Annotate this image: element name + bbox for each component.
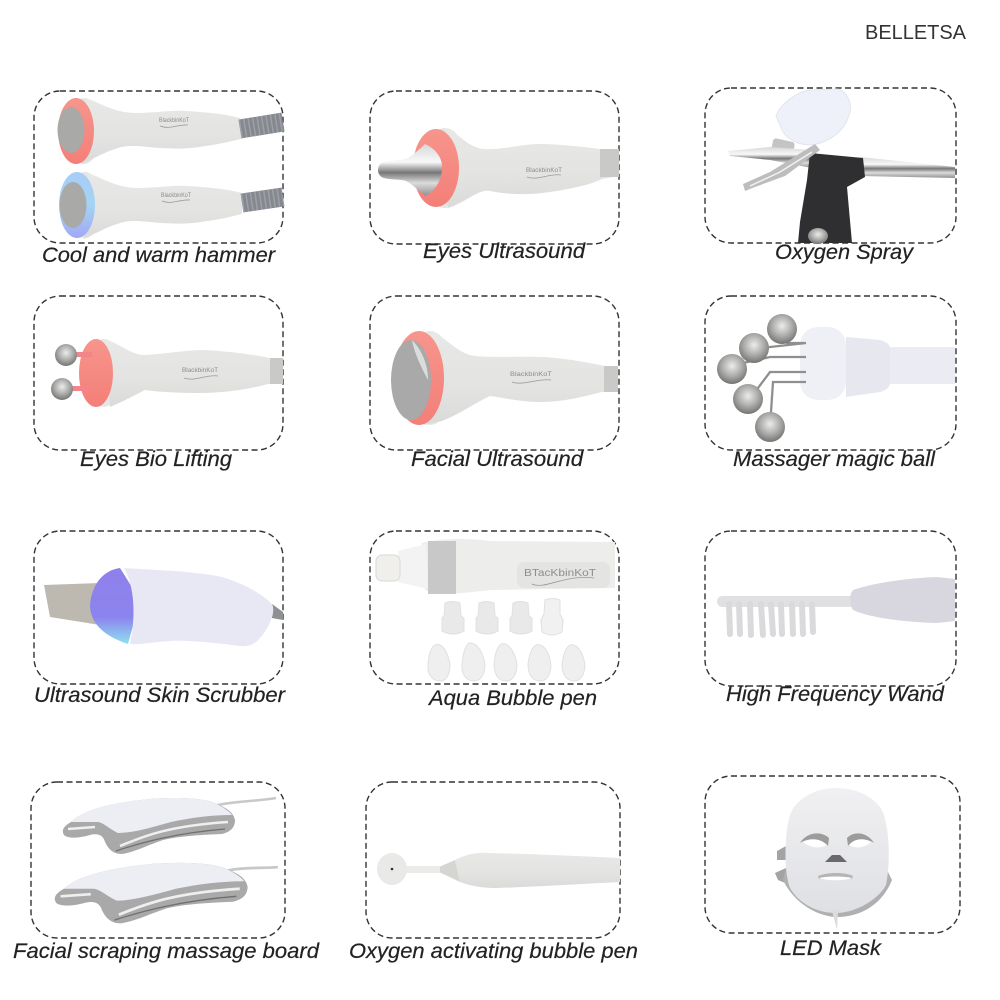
label: Facial Ultrasound (411, 448, 584, 471)
panel: high frequency wand (705, 531, 956, 706)
icon: bubble pen tips (428, 598, 585, 681)
frame (705, 531, 956, 686)
panel: oxygen spray (705, 88, 956, 264)
label: Eyes Bio Lifting (80, 448, 232, 471)
label: Facial scraping massage board (13, 940, 320, 963)
frame (705, 776, 960, 933)
label: Oxygen activating bubble pen (349, 940, 638, 963)
icon: lower massage board (55, 863, 278, 923)
icon: comb wand (717, 577, 955, 635)
label: LED Mask (780, 937, 883, 960)
icon: aqua pen: BTacKbinKoT (524, 568, 596, 579)
frame (31, 782, 285, 938)
icon: bubble pen (377, 853, 620, 888)
label: Oxygen Spray (775, 241, 915, 264)
icon: red hammer: BlackbinKoT (159, 117, 189, 124)
label: Eyes Ultrasound (423, 240, 586, 263)
panel: aqua bubble pen (370, 531, 619, 710)
frame (34, 91, 283, 243)
icon: blue hammer (59, 172, 283, 239)
frame (34, 296, 283, 450)
icon: facial ultrasound handpiece: BlackbinKoT (510, 371, 552, 378)
label: Aqua Bubble pen (427, 687, 597, 710)
panel: eyes bio lifting (34, 296, 283, 471)
panel: oxygen activating bubble pen (349, 782, 638, 963)
icon: facial ultrasound handpiece (391, 331, 618, 425)
label: High Frequency Wand (726, 683, 945, 706)
label: Cool and warm hammer (42, 244, 276, 267)
frame (370, 531, 619, 684)
icon: blue hammer: BlackbinKoT (161, 192, 191, 199)
frame (370, 296, 619, 450)
panel: ultrasound skin scrubber (34, 531, 286, 707)
icon: magic ball massager (717, 314, 955, 442)
panel: facial scraping massage board (13, 782, 320, 963)
icon: skin scrubber (44, 568, 283, 646)
frame (366, 782, 620, 938)
icon: eyes ultrasound handpiece (378, 128, 619, 208)
frame (34, 531, 283, 684)
icon: upper massage board (63, 798, 276, 854)
icon: red hammer (58, 98, 283, 164)
frame (705, 296, 956, 450)
brand name: BELLETSA (865, 22, 967, 44)
label: Massager magic ball (733, 448, 936, 471)
panel: LED mask (705, 776, 960, 960)
icon: bio lifting handpiece: BlackbinKoT (182, 367, 218, 374)
frame (705, 88, 956, 243)
panel: cool and warm hammer (34, 91, 283, 267)
panel: massager magic ball (705, 296, 956, 471)
frame (370, 91, 619, 244)
panel: facial ultrasound (370, 296, 619, 471)
label: Ultrasound Skin Scrubber (34, 684, 286, 707)
icon: eyes ultrasound handpiece: BlackbinKoT (526, 167, 562, 174)
icon: bio lifting handpiece (51, 339, 283, 407)
icon: aqua pen (376, 539, 615, 594)
icon: airbrush spray gun (728, 89, 955, 244)
panel: eyes ultrasound (370, 91, 619, 263)
icon: LED mask (775, 788, 892, 930)
